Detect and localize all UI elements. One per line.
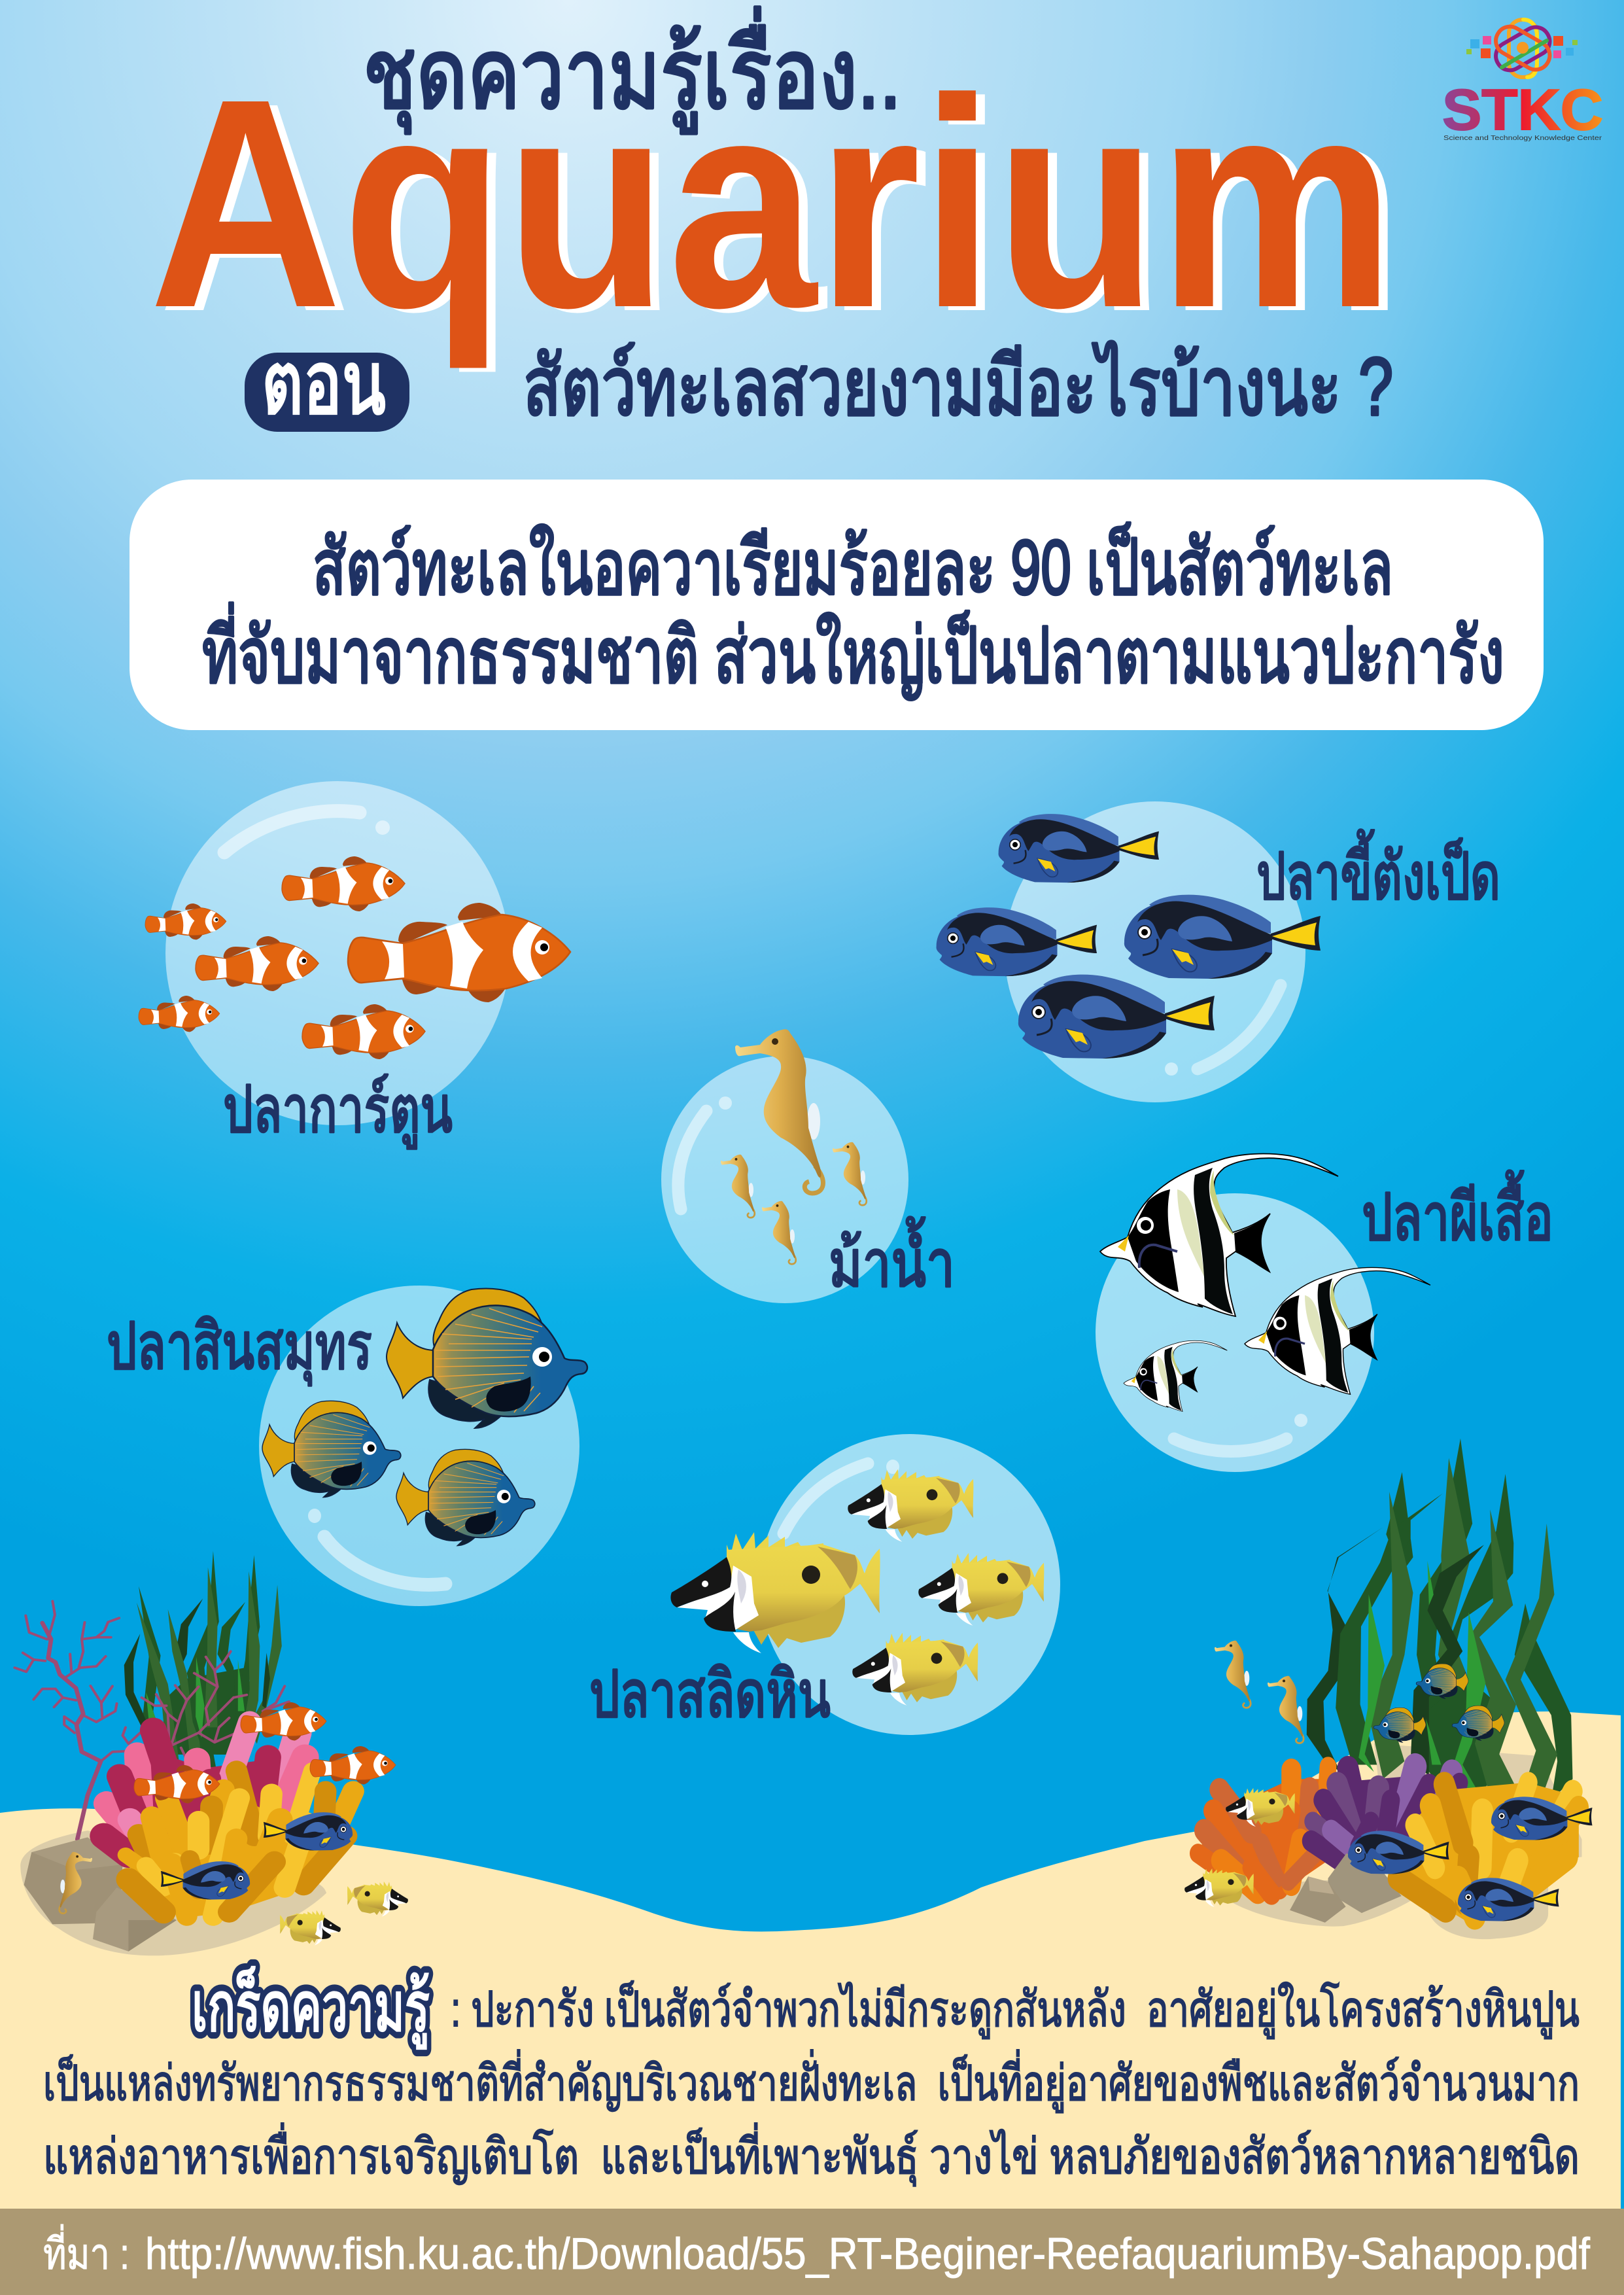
- intro box: [130, 480, 1544, 730]
- bubble: batfish: [259, 1286, 579, 1606]
- label: moorish idol: ปลาผีเสื้อ: [1362, 1170, 1553, 1254]
- episode pill: ตอน: [262, 334, 386, 432]
- source footer: ที่มา :: [43, 2224, 130, 2278]
- moorish idol fish: [1100, 1154, 1430, 1411]
- batfish: [262, 1289, 587, 1546]
- seahorses: [721, 1029, 867, 1264]
- label: seahorse: ม้าน้ำ: [829, 1217, 955, 1301]
- fun fact text: [43, 1981, 1580, 2186]
- bubble: clownfish: [165, 781, 510, 1125]
- label: clownfish: ปลาการ์ตูน: [223, 1073, 453, 1149]
- bubble: blue tang: [1005, 801, 1305, 1102]
- label: batfish: ปลาสินสมุทร: [107, 1310, 372, 1386]
- sand seabed: [0, 1711, 1621, 2211]
- right reef fish: [1184, 1641, 1593, 1921]
- clownfish school: [139, 856, 570, 1059]
- fun fact heading: เกร็ดความรู้: [192, 1966, 430, 2050]
- left reef fish: [60, 1702, 408, 1946]
- source footer: [0, 2209, 1624, 2295]
- label: blue tang: ปลาขี้ตังเป็ด: [1256, 830, 1500, 913]
- left reef scene: [14, 1551, 353, 1955]
- bubble: rabbitfish: [759, 1434, 1060, 1735]
- title: Aquarium: Aquarium: [158, 41, 1404, 376]
- title: Aquarium: Aquarium: [149, 37, 1395, 372]
- bubble: seahorse: [661, 1056, 908, 1303]
- logo: STKC: STKC: [1442, 77, 1603, 142]
- right reef scene: [1196, 1439, 1582, 1939]
- rabbitfish: [670, 1469, 1044, 1706]
- logo: STKC: [1442, 20, 1603, 142]
- blue tang school: [937, 814, 1321, 1059]
- logo: STKC: Science and Technology Knowledge Center: [1443, 135, 1602, 142]
- bubble: moorish idol: [1096, 1193, 1374, 1472]
- label: rabbitfish: ปลาสลิดหิน: [589, 1658, 831, 1731]
- title: intro line: ชุดความรู้เรื่อง..: [363, 7, 901, 134]
